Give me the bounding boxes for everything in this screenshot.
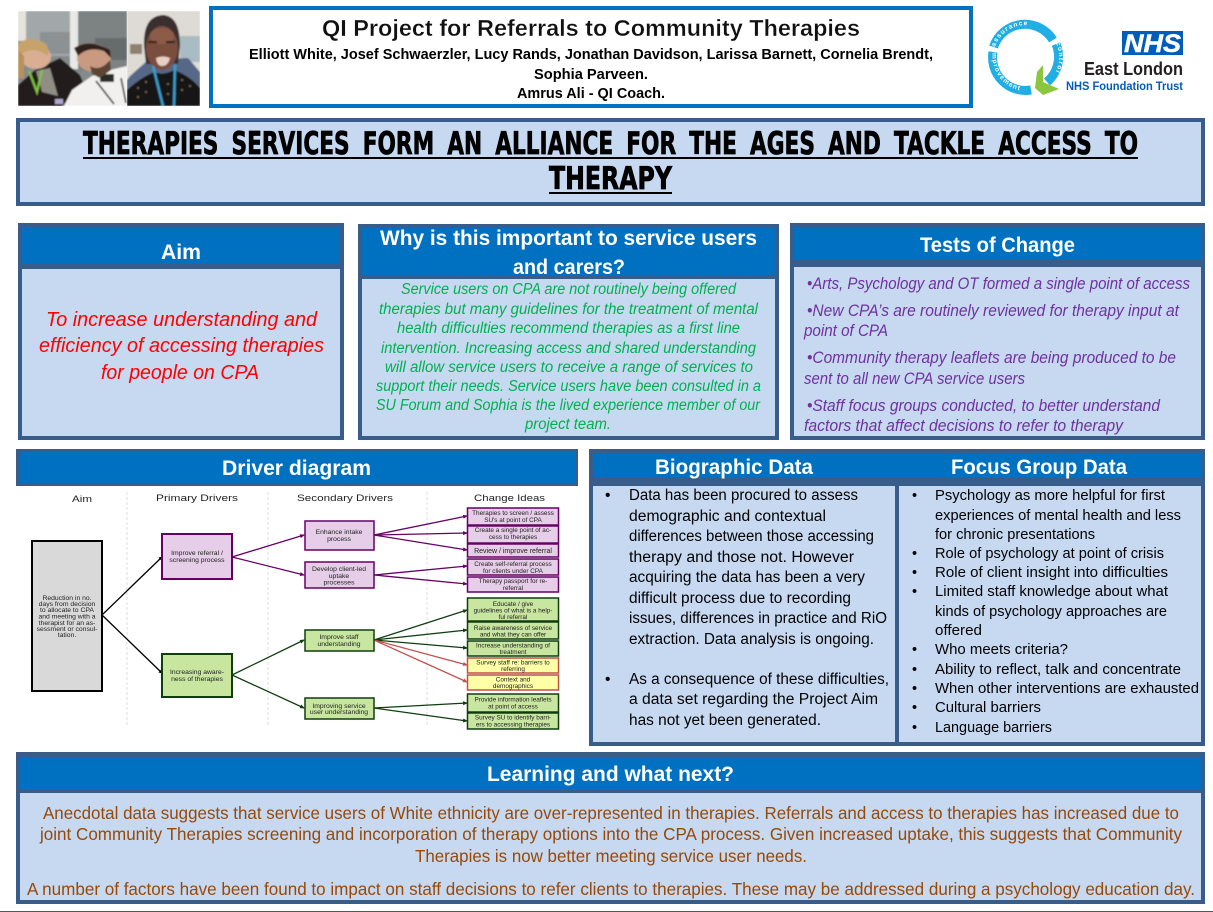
learning heading: Learning and what next? xyxy=(487,763,734,786)
tests list xyxy=(803,275,1190,435)
secondary driver boxes xyxy=(305,521,374,719)
logo: Q assurance improvement control: control xyxy=(1056,42,1064,73)
focus group list: Cultural barriers xyxy=(935,700,1041,716)
team photos xyxy=(18,11,200,106)
why body text: therapies but many guidelines for the treatment of mental xyxy=(379,301,759,318)
aim box: and meeting with a xyxy=(38,614,96,620)
change idea boxes: Create self-referral process xyxy=(474,561,552,568)
change idea boxes: referral xyxy=(503,585,523,592)
focus group list: Ability to reflect, talk and concentrate xyxy=(935,662,1181,678)
panel: learning and what next xyxy=(18,754,1203,902)
tests list: •Community therapy leaflets are being produced to be xyxy=(807,349,1176,367)
header box with project title and authors xyxy=(211,8,971,106)
secondary driver boxes: Develop client-led xyxy=(312,566,366,573)
focus group list: • xyxy=(912,584,917,600)
focus group list: When other interventions are exhausted xyxy=(935,681,1199,697)
change idea boxes: Survey SU to identify barri- xyxy=(475,714,551,722)
focus group list: Role of psychology at point of crisis xyxy=(935,546,1164,562)
why heading: and carers? xyxy=(513,256,625,279)
biographic text: extraction. Data analysis is ongoing. xyxy=(629,631,874,648)
panel: aim xyxy=(20,225,342,438)
focus group list: Limited staff knowledge about what xyxy=(935,584,1168,600)
panel: tests of change xyxy=(792,225,1203,438)
change idea boxes: Raise awareness of service xyxy=(474,625,553,632)
why body text: intervention. Increasing access and shared understanding xyxy=(381,340,756,357)
secondary driver boxes: Improve staff xyxy=(319,634,359,641)
change idea boxes xyxy=(468,508,558,729)
why body text: will allow service users to receive a range of services to xyxy=(385,359,753,376)
change idea boxes: demographics xyxy=(493,683,533,690)
primary driver boxes xyxy=(162,534,232,697)
focus group list: Language barriers xyxy=(935,720,1052,736)
connector arrows xyxy=(102,516,467,721)
biographic text xyxy=(605,487,889,729)
tests list: •New CPA’s are routinely reviewed for therapy input at xyxy=(807,302,1180,320)
change idea boxes: Provide information leaflets xyxy=(474,696,552,704)
focus group heading: Focus Group Data xyxy=(951,456,1127,479)
change idea boxes: Survey staff re: barriers to xyxy=(476,660,550,666)
focus group list: • xyxy=(912,662,917,678)
change idea boxes: Therapy passport for re- xyxy=(479,578,547,585)
focus group list: experiences of mental health and less xyxy=(935,508,1181,524)
secondary driver boxes: uptake xyxy=(329,573,349,580)
headline banner: THERAPY xyxy=(549,161,672,197)
column headers: Aim xyxy=(72,494,92,504)
learning text xyxy=(27,803,1195,899)
focus group list: kinds of psychology approaches are xyxy=(935,604,1167,620)
focus group list: • xyxy=(912,700,917,716)
change idea boxes: and what they can offer xyxy=(480,632,547,638)
focus group list: • xyxy=(912,681,917,697)
why body text: project team. xyxy=(524,416,611,433)
secondary driver boxes: processes xyxy=(324,580,355,586)
driver diagram xyxy=(32,492,558,729)
driver diagram heading: Driver diagram xyxy=(222,457,371,480)
change idea boxes: at point of access xyxy=(488,704,538,710)
tests list: sent to all new CPA service users xyxy=(804,370,1025,388)
biographic text: therapy and those not. However xyxy=(629,549,854,566)
aim statement xyxy=(39,309,324,384)
focus group list: Who meets criteria? xyxy=(935,642,1068,658)
aim box: therapist for an as- xyxy=(39,620,95,627)
why body text xyxy=(376,281,761,433)
aim statement: efficiency of accessing therapies xyxy=(39,335,324,357)
change idea boxes: guidelines of what is a help- xyxy=(474,608,552,614)
why heading: Why is this important to service users xyxy=(380,227,757,250)
aim box: to allocate to CPA xyxy=(40,607,94,614)
column headers xyxy=(72,493,546,504)
change idea boxes: Therapies to screen / assess xyxy=(472,510,554,517)
change idea boxes: for clients under CPA xyxy=(483,568,544,575)
why body text: SU Forum and Sophia is the lived experience member of our xyxy=(376,397,761,414)
focus group list: offered xyxy=(935,623,982,639)
why heading xyxy=(380,227,757,279)
why body text: support their needs. Service users have been consulted in a xyxy=(376,378,761,395)
primary driver boxes: Increasing aware- xyxy=(170,669,224,676)
biographic heading: Biographic Data xyxy=(655,456,813,479)
biographic text: has not yet been generated. xyxy=(629,712,821,729)
biographic text: Data has been procured to assess xyxy=(629,487,858,504)
logo: NHS East London: East London xyxy=(1084,59,1183,79)
biographic text: issues, differences in practice and RiO xyxy=(629,610,887,627)
column headers: Secondary Drivers xyxy=(297,493,394,503)
change idea boxes: SU's at point of CPA xyxy=(484,517,543,524)
tests heading: Tests of Change xyxy=(920,234,1075,257)
change idea boxes: Context and xyxy=(496,676,531,684)
logo: Q assurance improvement control: assurance xyxy=(992,22,1027,46)
logo: NHS East London: NHS xyxy=(1124,30,1181,58)
secondary driver boxes: Improving service xyxy=(312,703,366,710)
change idea boxes: cess to therapies xyxy=(489,534,537,541)
logo: NHS East London xyxy=(1066,30,1183,93)
column headers: Primary Drivers xyxy=(156,493,239,503)
headline banner xyxy=(18,120,1203,204)
tests list: point of CPA xyxy=(803,322,888,340)
column headers: Change Ideas xyxy=(474,493,546,503)
focus group list: • xyxy=(912,546,917,562)
secondary driver boxes: user understanding xyxy=(310,709,368,716)
tests list: •Staff focus groups conducted, to better understand xyxy=(807,397,1161,415)
biographic text: • xyxy=(605,671,610,688)
tests list: factors that affect decisions to refer to therapy xyxy=(804,417,1125,435)
why body text: Service users on CPA are not routinely being offered xyxy=(401,281,737,298)
change idea boxes: referring xyxy=(501,666,525,673)
aim statement: To increase understanding and xyxy=(46,309,318,331)
authors: Elliott White, Josef Schwaerzler, Lucy Rands, Jonathan Davidson, Larissa Barnett, Cornelia Brendt, xyxy=(249,47,933,63)
aim statement: for people on CPA xyxy=(101,362,259,384)
focus group list: Psychology as more helpful for first xyxy=(935,488,1165,504)
change idea boxes: Review / improve referral xyxy=(474,548,552,555)
logo: Q assurance improvement control: improvement xyxy=(991,53,1020,90)
change idea boxes: treatment xyxy=(500,649,527,656)
focus group list: • xyxy=(912,720,917,736)
panel: why is this important xyxy=(360,226,777,438)
focus group list: for chronic presentations xyxy=(935,527,1095,543)
biographic text: • xyxy=(605,487,610,504)
change idea boxes: Educate / give xyxy=(493,601,534,608)
learning text: Therapies is now better meeting service user needs. xyxy=(415,846,807,866)
focus group list: • xyxy=(912,642,917,658)
biographic text: a data set regarding the Project Aim xyxy=(629,691,878,708)
biographic text: difficult process due to recording xyxy=(629,590,851,607)
learning text: A number of factors have been found to impact on staff decisions to refer clients to therapies. These may be addressed during a psychology education day. xyxy=(27,879,1195,899)
panel: biographic and focus group data xyxy=(591,451,1203,744)
authors xyxy=(249,47,933,102)
secondary driver boxes: process xyxy=(327,536,351,543)
focus group list: • xyxy=(912,488,917,504)
authors: Sophia Parveen. xyxy=(534,67,648,83)
learning text: Anecdotal data suggests that service users of White ethnicity are over-represented in therapies. Referrals and access to therapies has increased due to xyxy=(43,803,1179,823)
secondary driver boxes: Enhance intake xyxy=(316,529,363,536)
change idea boxes: ers to accessing therapies xyxy=(476,722,550,728)
aim box xyxy=(32,541,102,691)
project title: QI Project for Referrals to Community Therapies xyxy=(322,15,860,41)
aim box: tation. xyxy=(58,632,76,639)
primary driver boxes: screening process xyxy=(169,557,225,564)
biographic text: acquiring the data has been a very xyxy=(629,569,865,586)
change idea boxes: ful referral xyxy=(499,614,527,621)
aim box: sessment or consul- xyxy=(37,626,97,633)
driver diagram heading xyxy=(18,450,576,484)
why body text: health difficulties recommend therapies as a first line xyxy=(397,320,740,337)
focus group list: Role of client insight into difficulties xyxy=(935,565,1168,581)
aim box: days from decision xyxy=(39,601,96,608)
aim box: Reduction in no. xyxy=(42,595,92,602)
focus group list xyxy=(912,488,1199,736)
logo: Q assurance improvement control xyxy=(988,20,1064,95)
secondary driver boxes: understanding xyxy=(317,641,361,648)
change idea boxes: Create a single point of ac- xyxy=(475,527,551,534)
biographic text: As a consequence of these difficulties, xyxy=(629,671,889,688)
logo: NHS East London: NHS Foundation Trust xyxy=(1066,79,1183,93)
primary driver boxes: ness of therapies xyxy=(171,676,223,683)
learning text: joint Community Therapies screening and incorporation of therapy options into the CPA process. Given increased uptake, this suggests that Community xyxy=(39,824,1182,844)
aim heading: Aim xyxy=(161,241,201,264)
focus group list: • xyxy=(912,565,917,581)
primary driver boxes: Improve referral / xyxy=(171,550,223,557)
change idea boxes: Increase understanding of xyxy=(476,642,550,650)
authors: Amrus Ali - QI Coach. xyxy=(517,86,665,102)
biographic text: demographic and contextual xyxy=(629,508,826,525)
biographic text: differences between those accessing xyxy=(629,528,874,545)
